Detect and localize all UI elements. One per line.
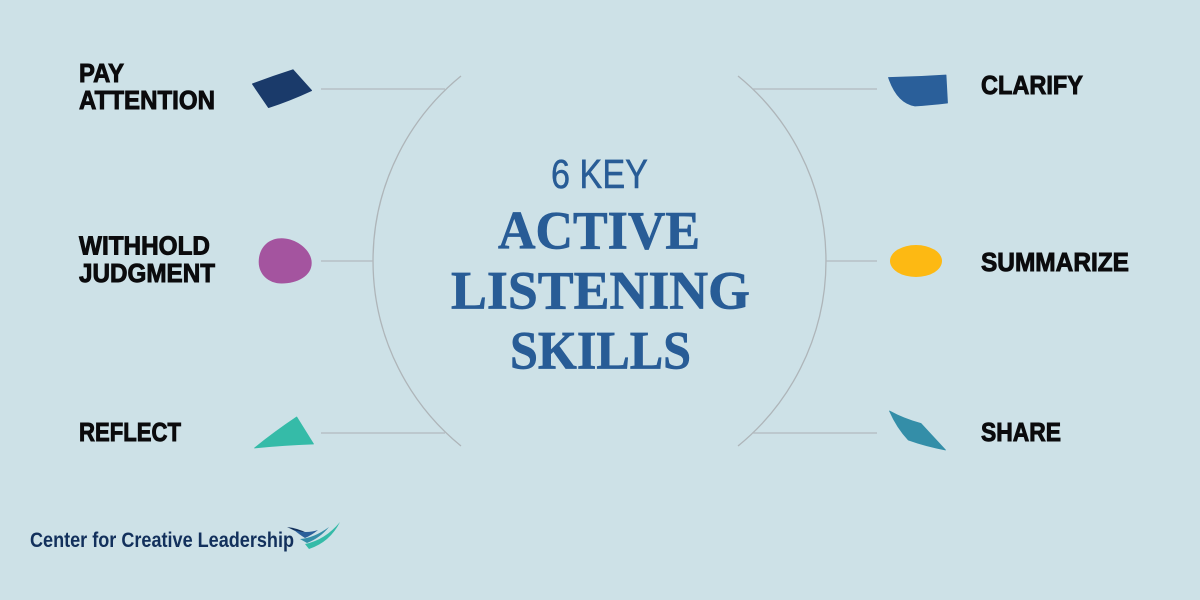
title [451,151,750,381]
label: summarize: SUMMARIZE [981,249,1129,277]
label: reflect: REFLECT [79,419,181,447]
title line: 6 KEY: 6 KEY [551,151,648,197]
title line: LISTENING: LISTENING [451,261,750,321]
icon: blue rounded quadrilateral [888,75,948,106]
label: pay attention: PAY [79,60,124,88]
logo swoosh [287,522,340,549]
label: share: SHARE [981,419,1061,447]
icon: yellow ellipse [890,245,942,277]
label: withhold judgment: JUDGMENT [79,260,215,288]
label: pay attention [79,60,215,115]
title line: SKILLS: SKILLS [510,321,691,381]
label: withhold judgment [79,232,215,288]
label: clarify: CLARIFY [981,72,1083,100]
icon: teal triangle [254,417,314,448]
right arc [738,76,826,446]
label: pay attention: ATTENTION [79,87,215,115]
icon: teal-blue kite [890,411,946,450]
logo wordmark: Center for Creative Leadership [30,529,294,552]
left arc [373,76,461,446]
connector lines [321,89,877,433]
title line: ACTIVE: ACTIVE [498,201,700,261]
label: withhold judgment: WITHHOLD [79,232,210,260]
logo [30,522,340,552]
icon: navy quadrilateral [252,70,312,108]
icon: purple blob [259,238,312,284]
